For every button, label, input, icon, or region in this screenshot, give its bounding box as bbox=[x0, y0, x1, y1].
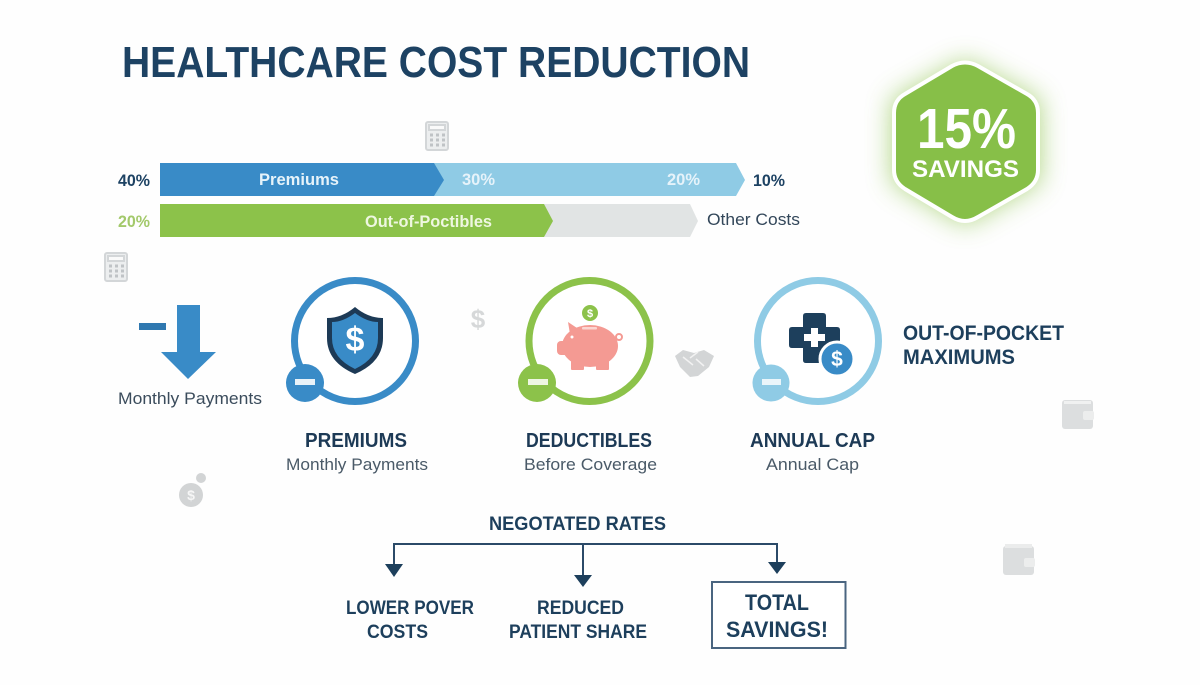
stacked bar: out-of-pocket: Other Costs bbox=[707, 210, 800, 229]
stacked bar: out-of-pocket: Out-of-Poctibles bbox=[365, 212, 492, 231]
icon: calculator left bbox=[105, 253, 127, 281]
outcome: total savings box bbox=[712, 582, 846, 648]
label: premiums: PREMIUMS bbox=[305, 430, 407, 452]
label: deductibles: Before Coverage bbox=[524, 455, 657, 474]
stacked bar: premiums: 20% bbox=[667, 170, 700, 189]
label: deductibles: DEDUCTIBLES bbox=[526, 430, 652, 452]
icon: handshake bbox=[675, 350, 714, 377]
label: premiums bbox=[286, 430, 428, 474]
icon: dollar sign: $ bbox=[471, 304, 486, 334]
stacked bar: premiums: 30% bbox=[462, 170, 495, 189]
label: annual cap: ANNUAL CAP bbox=[750, 430, 875, 452]
stacked bar: out-of-pocket: 20% bbox=[118, 212, 150, 231]
outcome: total savings box: SAVINGS! bbox=[726, 617, 828, 642]
label: annual cap: Annual Cap bbox=[766, 455, 859, 474]
outcome: lower power costs bbox=[346, 598, 474, 643]
outcome: reduced patient share: PATIENT SHARE bbox=[509, 622, 647, 643]
stacked bar: premiums: 10% bbox=[753, 171, 785, 190]
circle: premiums bbox=[286, 280, 416, 402]
icon: shield: $ bbox=[346, 321, 365, 359]
outcome: reduced patient share: REDUCED bbox=[537, 598, 624, 619]
heading: out-of-pocket maximums: OUT-OF-POCKET bbox=[903, 322, 1064, 345]
icon: piggy bank: $ bbox=[587, 308, 593, 320]
circle: deductibles bbox=[518, 280, 650, 402]
outcome: lower power costs: COSTS bbox=[367, 622, 428, 643]
badge: 15% savings bbox=[892, 60, 1040, 225]
stacked bar: premiums: Premiums bbox=[259, 170, 339, 189]
badge: 15% savings: 15% bbox=[917, 97, 1016, 161]
icon: calculator top bbox=[426, 122, 448, 150]
icon: wallet right bbox=[1062, 400, 1094, 429]
title: HEALTHCARE COST REDUCTION bbox=[122, 38, 750, 87]
outcome: total savings box: TOTAL bbox=[745, 590, 809, 615]
down arrow: monthly payments bbox=[118, 305, 262, 408]
icon: medical cross with dollar: $ bbox=[831, 348, 843, 371]
label: premiums: Monthly Payments bbox=[286, 455, 428, 474]
label: annual cap bbox=[750, 430, 875, 474]
icon: coin: $ bbox=[187, 487, 195, 503]
flow arrows bbox=[385, 544, 786, 587]
stacked bar: premiums bbox=[118, 163, 785, 196]
heading: out-of-pocket maximums: MAXIMUMS bbox=[903, 346, 1015, 369]
badge: 15% savings: SAVINGS bbox=[912, 156, 1019, 183]
down arrow: monthly payments: Monthly Payments bbox=[118, 389, 262, 408]
heading: negotiated rates: NEGOTATED RATES bbox=[489, 514, 666, 535]
label: deductibles bbox=[524, 430, 657, 474]
stacked bar: premiums: 40% bbox=[118, 171, 150, 190]
outcome: lower power costs: LOWER POVER bbox=[346, 598, 474, 619]
outcome: reduced patient share bbox=[509, 598, 647, 643]
circle: annual cap bbox=[752, 280, 878, 402]
icon: wallet lower bbox=[1003, 544, 1035, 575]
heading: out-of-pocket maximums bbox=[903, 322, 1064, 369]
stacked bar: out-of-pocket bbox=[118, 204, 800, 237]
icon: coin bbox=[179, 473, 206, 507]
